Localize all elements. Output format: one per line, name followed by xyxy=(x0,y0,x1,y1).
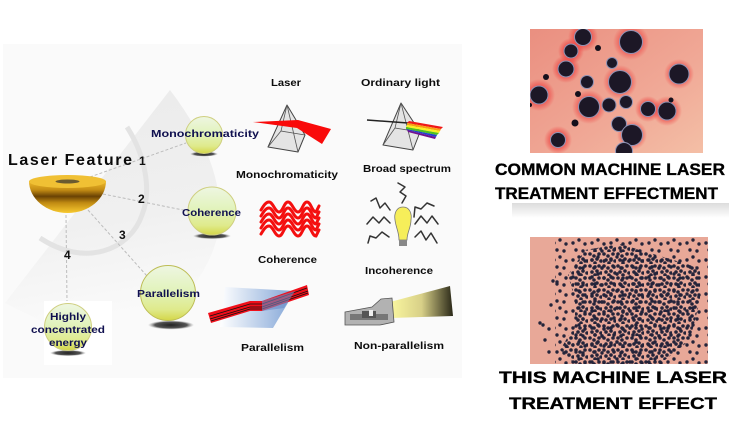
label: Highly concentrated energy xyxy=(31,311,105,349)
white box behind highly concentrated energy xyxy=(44,301,112,365)
fan backdrop xyxy=(5,90,220,329)
number 1: 1 xyxy=(139,154,146,168)
label: Incoherence: Incoherence xyxy=(365,265,433,277)
sphere: Parallelism xyxy=(140,266,196,330)
column heading: Laser: Laser xyxy=(271,77,301,89)
label: Coherence: Coherence xyxy=(258,254,317,266)
heading: Laser Feature: Laser Feature xyxy=(8,152,132,169)
number 2: 2 xyxy=(138,192,145,206)
caption: this machine: TREATMENT EFFECT xyxy=(509,394,718,413)
sphere: Highly concentrated energy xyxy=(44,304,92,356)
label: Highly concentrated energy: Highly xyxy=(50,311,86,323)
icon: coherent red waves xyxy=(261,202,319,236)
icon: prism with red laser beam xyxy=(253,105,331,152)
label: Highly concentrated energy: energy xyxy=(49,337,87,349)
caption: common machine: TREATMENT EFFECTMENT xyxy=(495,184,719,203)
number 3: 3 xyxy=(119,228,126,242)
icon: prism with rainbow spectrum xyxy=(367,103,443,150)
photo: common machine treatment xyxy=(530,29,703,153)
shadow strip xyxy=(512,203,729,218)
caption: this machine xyxy=(499,368,727,413)
column heading: Ordinary light: Ordinary light xyxy=(361,77,441,89)
label: Monochromaticity: Monochromaticity xyxy=(236,169,338,181)
sphere: Monochromaticity xyxy=(186,116,222,156)
label: Highly concentrated energy: concentrated xyxy=(31,324,105,336)
icon: parallel beam through blue plate xyxy=(208,285,309,328)
label: Coherence: Coherence xyxy=(182,207,241,219)
connector lines xyxy=(66,143,188,302)
label: Parallelism: Parallelism xyxy=(137,288,200,300)
photo: this machine treatment xyxy=(530,237,708,364)
caption: common machine: COMMON MACHINE LASER xyxy=(495,160,725,179)
label: Non-parallelism: Non-parallelism xyxy=(354,340,444,352)
panel: laser feature diagram background xyxy=(3,44,462,378)
caption: common machine xyxy=(495,160,725,203)
inner arc xyxy=(40,127,147,253)
icon: light bulb with incoherent squiggles xyxy=(367,183,438,246)
label: Broad spectrum: Broad spectrum xyxy=(363,163,451,175)
icon: flashlight with diverging beam xyxy=(345,286,453,325)
label: Monochromaticity: Monochromaticity xyxy=(151,128,259,140)
number 4: 4 xyxy=(64,248,71,262)
caption: this machine: THIS MACHINE LASER xyxy=(499,368,727,387)
icon: gold hemisphere xyxy=(29,175,106,213)
label: Parallelism: Parallelism xyxy=(241,342,304,354)
sphere: Coherence xyxy=(188,187,236,239)
